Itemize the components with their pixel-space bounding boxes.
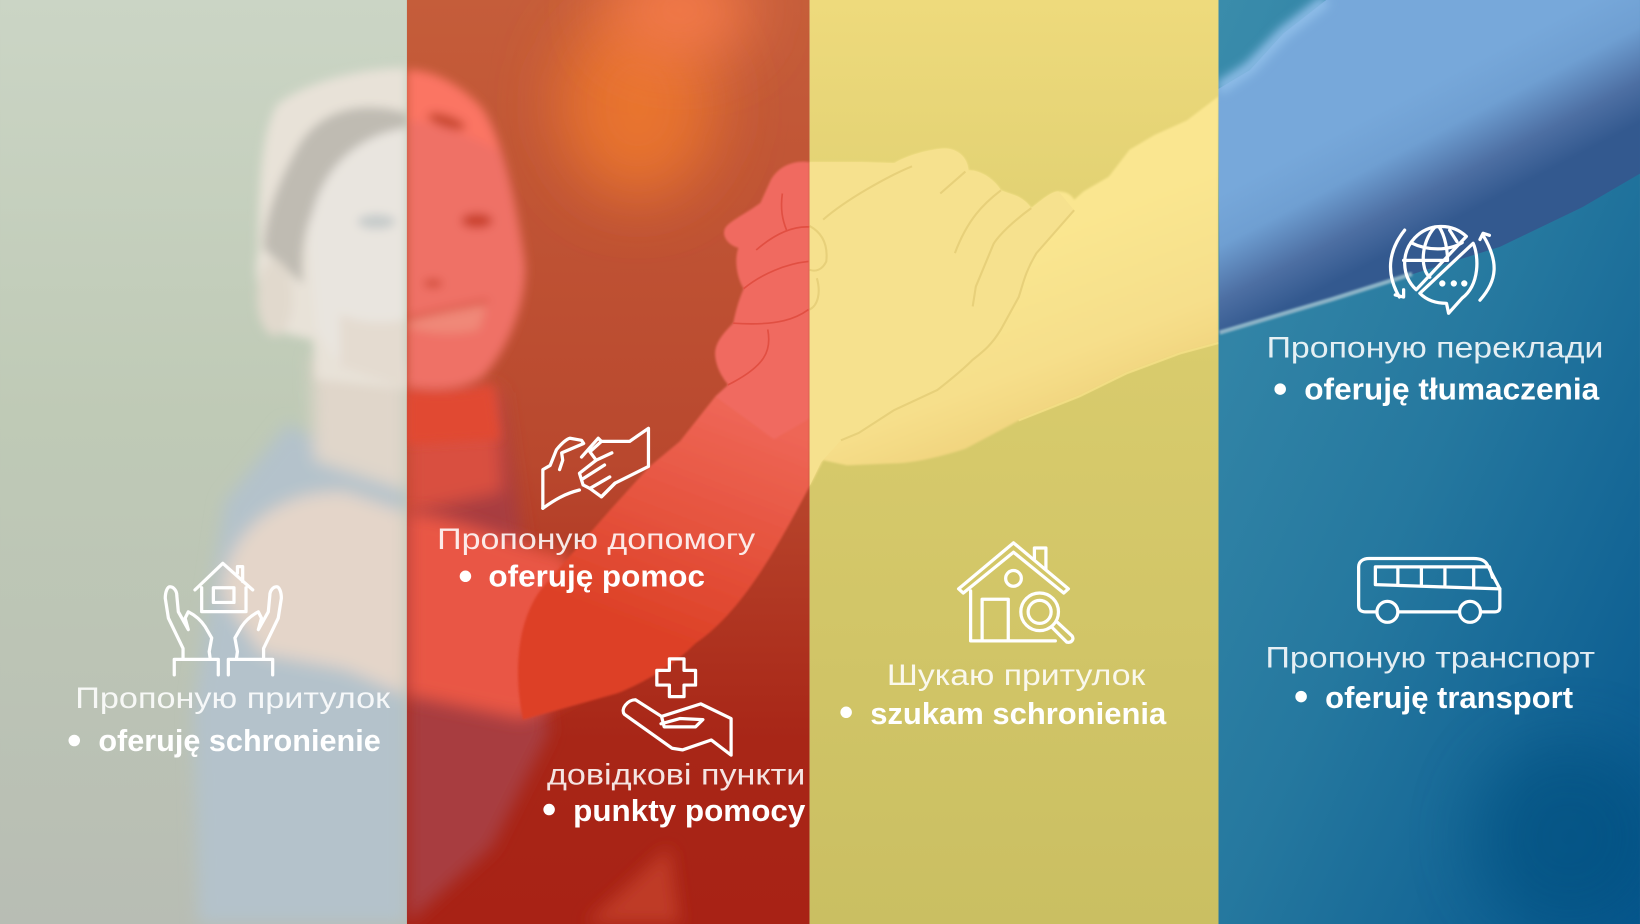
- text: offer translations: oferuję tłumaczenia: [1304, 374, 1600, 407]
- icon: house with magnifier: [959, 543, 1073, 642]
- icon: bus: [1359, 559, 1500, 622]
- text: offer shelter: oferuję schronienie: [98, 725, 381, 758]
- text: offer transport: Пропоную транспорт: [1266, 641, 1595, 674]
- icon: handshake: [543, 428, 648, 508]
- text: offer transport: [1266, 641, 1595, 715]
- panel: blue band with sleeve: [1218, 0, 1640, 924]
- icon: globe and speech bubble translation: [1391, 226, 1494, 313]
- text: offer help: oferuję pomoc: [488, 561, 705, 594]
- text: offer transport: oferuję transport: [1325, 682, 1573, 715]
- text: offer translations: [1267, 332, 1603, 407]
- icon: house in two hands: [165, 563, 281, 675]
- text: offer shelter: Пропоную притулок: [75, 682, 391, 715]
- panel: red band with face and arm: [407, 0, 810, 924]
- text: help points: punkty pomocy: [573, 795, 805, 828]
- text: help points: [543, 758, 805, 828]
- text: help points: довідкові пункти: [547, 758, 805, 791]
- text: offer translations: Пропоную переклади: [1267, 332, 1603, 365]
- text: looking for shelter: Шукаю притулок: [887, 659, 1146, 692]
- panel: yellow band with hands: [810, 0, 1218, 924]
- text: offer help: [437, 523, 755, 594]
- red arm blurred shoulder: [406, 508, 570, 726]
- text: offer shelter: [69, 682, 391, 758]
- icon: medical cross over hand: [623, 659, 731, 755]
- text: offer help: Пропоную допомогу: [437, 523, 755, 556]
- text: looking for shelter: [840, 659, 1167, 731]
- text: looking for shelter: szukam schronienia: [870, 698, 1167, 731]
- panel: pale green band with woman: [0, 0, 407, 924]
